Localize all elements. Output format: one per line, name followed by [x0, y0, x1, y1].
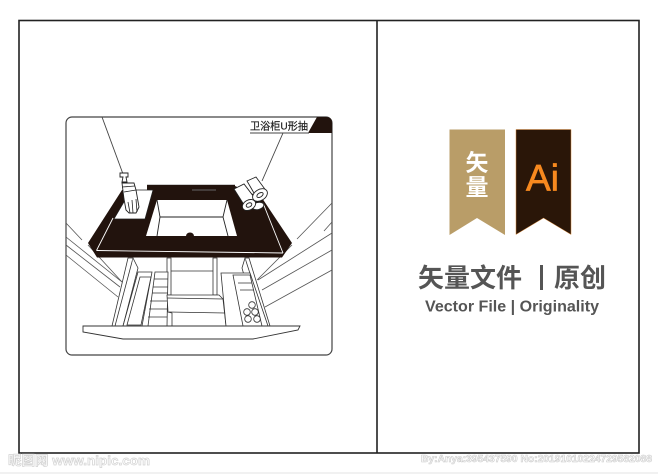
ribbon: vector: 量	[466, 174, 488, 200]
cups	[249, 302, 255, 308]
heading	[418, 263, 606, 293]
ribbon: Ai	[516, 130, 571, 234]
right organiser	[221, 273, 268, 326]
drawer walls	[112, 258, 133, 326]
ribbon: vector	[450, 130, 505, 235]
watermark right: By:Anya:395437590 No:20191010224729582088	[421, 454, 652, 465]
countertop	[88, 184, 292, 258]
panel outline	[66, 117, 332, 355]
header tab	[308, 117, 332, 133]
subheading: Vector File | Originality	[425, 298, 599, 316]
side wall lines	[66, 203, 332, 307]
tray and soap dispenser	[114, 173, 153, 219]
centre organiser	[167, 295, 226, 326]
ribbon: vector: 矢	[466, 150, 488, 176]
sink basin	[146, 200, 237, 236]
heading: 矢量文件	[418, 263, 522, 293]
watermark left: 昵图网 www.nipic.com	[8, 453, 150, 468]
heading: 原创	[554, 263, 606, 293]
left organiser	[123, 272, 152, 326]
countertop highlight lines	[96, 184, 283, 253]
ribbon: Ai: Ai	[526, 158, 559, 198]
panel: vector file badge	[418, 130, 606, 316]
drawer front plate	[83, 326, 300, 339]
rolled towels	[234, 177, 270, 213]
panel: bathroom cabinet line drawing	[66, 117, 332, 355]
header underline and leader lines	[102, 117, 309, 181]
drawer	[112, 258, 270, 326]
header label: 卫浴柜U形抽	[250, 120, 308, 132]
